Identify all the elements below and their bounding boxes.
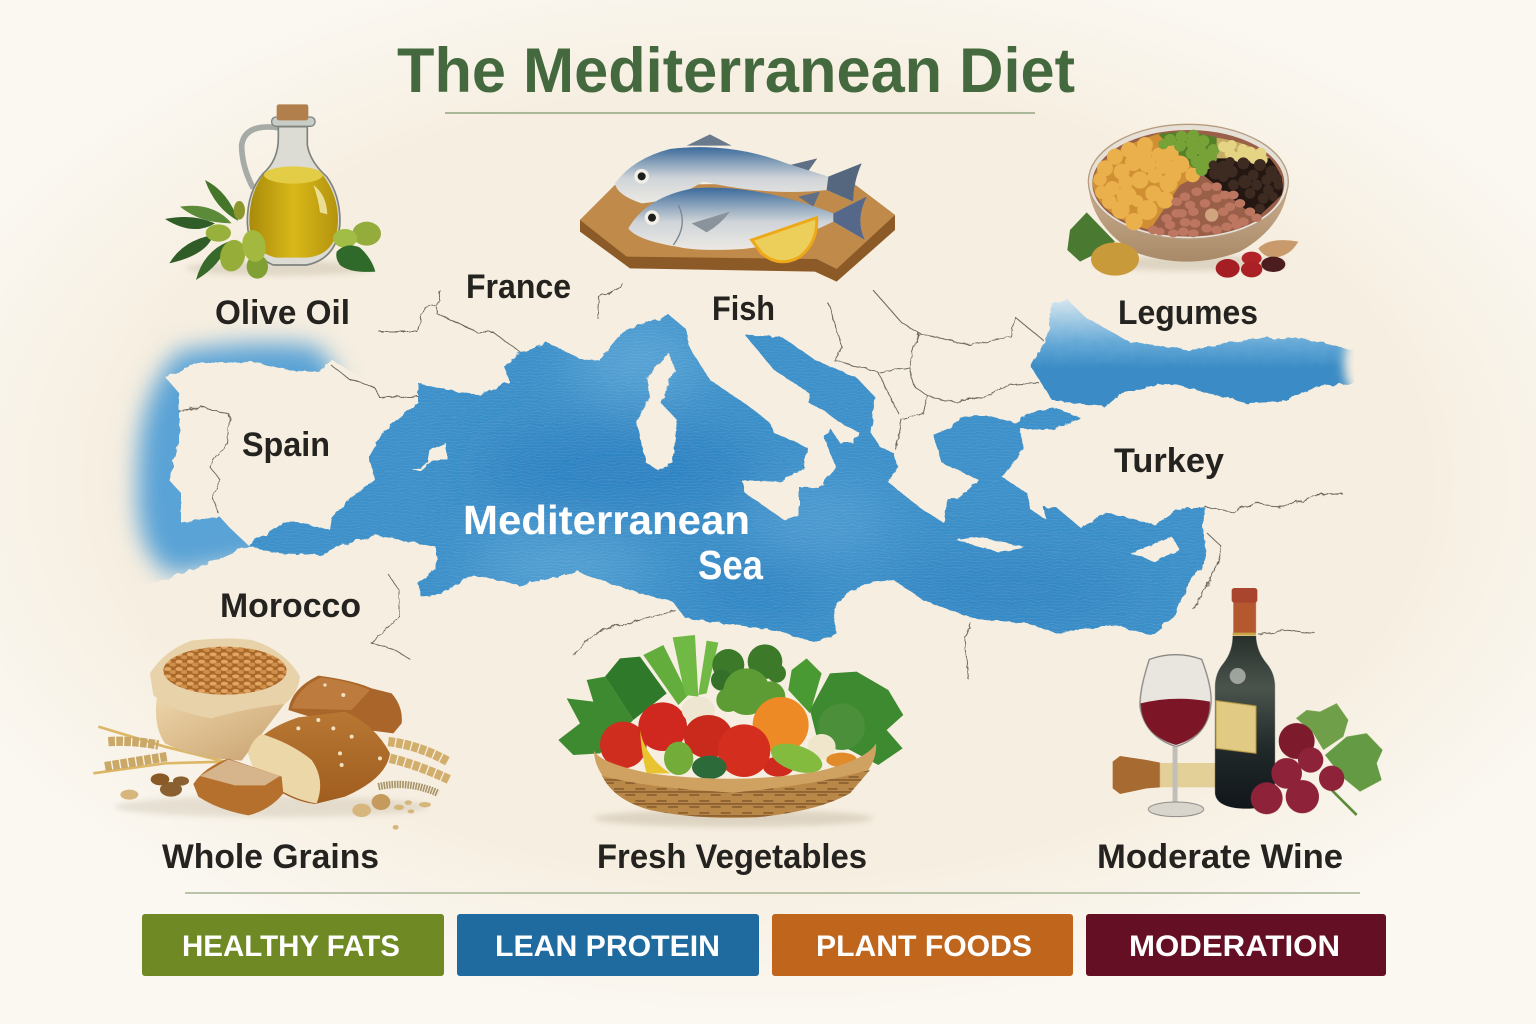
wheat ears right bbox=[388, 742, 450, 780]
label: moderate wine: Moderate Wine bbox=[1097, 838, 1343, 876]
label: legumes: Legumes bbox=[1118, 294, 1258, 332]
black beans bbox=[1209, 157, 1283, 213]
oil bbox=[249, 169, 338, 258]
collar bbox=[272, 117, 315, 126]
leaves left bbox=[165, 180, 238, 280]
potato bbox=[1091, 242, 1139, 276]
basket rim bbox=[594, 743, 876, 793]
icon: olive oil bbox=[165, 104, 381, 280]
label: fish: Fish bbox=[712, 290, 775, 328]
badge: healthy fats bbox=[142, 914, 444, 976]
badge: plant foods bbox=[772, 914, 1073, 976]
icon: whole grains bbox=[93, 638, 450, 830]
country labels: Morocco bbox=[220, 587, 361, 625]
back loaf bbox=[288, 676, 402, 733]
vine leaves bbox=[1296, 703, 1383, 815]
Atlantic ocean wash bbox=[137, 343, 345, 575]
glass jug bbox=[247, 127, 340, 265]
tan beans bbox=[1218, 140, 1268, 165]
slice bbox=[193, 759, 283, 815]
grapes bbox=[1251, 723, 1344, 814]
badge: moderation bbox=[1086, 914, 1386, 976]
country labels: France bbox=[466, 268, 571, 306]
bowl body bbox=[1088, 182, 1288, 262]
handle bbox=[242, 127, 278, 188]
left leaves bbox=[558, 657, 667, 755]
chickpea bed bbox=[1092, 133, 1200, 230]
broccoli bbox=[711, 644, 786, 715]
Mediterranean Sea bbox=[240, 310, 1210, 650]
bottom divider bbox=[185, 892, 1360, 894]
grain bbox=[163, 647, 287, 695]
fish 2 bbox=[628, 188, 867, 250]
Iberia land bbox=[165, 360, 400, 545]
sack body bbox=[156, 698, 285, 761]
country labels bbox=[220, 268, 1224, 625]
country labels: Turkey bbox=[1114, 442, 1224, 480]
badge: lean protein: LEAN PROTEIN bbox=[495, 930, 720, 963]
seeds bbox=[120, 773, 431, 830]
cork roll bbox=[1113, 756, 1217, 794]
sesame seeds bbox=[296, 683, 382, 767]
front loaf bbox=[248, 712, 390, 804]
red beans bbox=[1148, 182, 1262, 237]
wheat stalks bbox=[93, 727, 225, 773]
Black Sea bbox=[1031, 300, 1354, 407]
shallot bbox=[1258, 240, 1298, 258]
bowl rim bbox=[1088, 124, 1288, 239]
loaf crumb bbox=[248, 734, 320, 803]
bottle bbox=[1215, 588, 1275, 809]
North Africa land bbox=[130, 546, 340, 640]
borders bbox=[179, 285, 1342, 680]
icon: vegetable basket bbox=[558, 635, 903, 827]
country labels: Spain bbox=[242, 426, 330, 464]
wine glass bbox=[1140, 655, 1211, 817]
sea label: Sea bbox=[698, 542, 764, 588]
badge: plant foods: PLANT FOODS bbox=[816, 930, 1032, 963]
highlight bbox=[313, 185, 327, 214]
black bed bbox=[1203, 158, 1283, 218]
label: whole grains: Whole Grains bbox=[162, 838, 379, 876]
icon: legumes bowl bbox=[1067, 124, 1298, 278]
pea bed bbox=[1158, 132, 1220, 175]
herb leaves bbox=[1067, 212, 1115, 262]
Black Sea fade bbox=[1344, 330, 1384, 398]
oil surface bbox=[264, 166, 323, 184]
badge: moderation: MODERATION bbox=[1129, 930, 1340, 963]
map of the Mediterranean bbox=[130, 268, 1384, 680]
bowl inside bbox=[1092, 130, 1284, 237]
label: fresh vegetables: Fresh Vegetables bbox=[597, 838, 867, 876]
fish 1 bbox=[615, 134, 862, 203]
board top bbox=[580, 183, 895, 269]
badge: lean protein bbox=[457, 914, 759, 976]
tan bed bbox=[1217, 138, 1270, 162]
beans bbox=[1216, 259, 1240, 278]
chickpeas bbox=[1093, 137, 1200, 230]
vegetables bbox=[600, 697, 857, 779]
basket weave bbox=[602, 770, 870, 818]
board side bbox=[580, 183, 895, 282]
green peas bbox=[1158, 130, 1219, 176]
badge: healthy fats: HEALTHY FATS bbox=[182, 930, 400, 963]
wheat ears left bbox=[105, 741, 167, 767]
sack rim bbox=[150, 638, 300, 718]
cork bbox=[277, 104, 308, 120]
celery stalks bbox=[643, 635, 718, 705]
lemon bbox=[752, 218, 817, 262]
title: The Mediterranean Diet bbox=[397, 36, 1075, 106]
right leaves bbox=[788, 658, 903, 765]
sea label bbox=[463, 497, 764, 588]
icon: fish on board bbox=[580, 134, 895, 282]
sea label: Mediterranean bbox=[463, 497, 750, 543]
label: olive oil: Olive Oil bbox=[215, 294, 350, 332]
olives bbox=[206, 201, 381, 279]
icon: wine bbox=[1113, 588, 1383, 817]
